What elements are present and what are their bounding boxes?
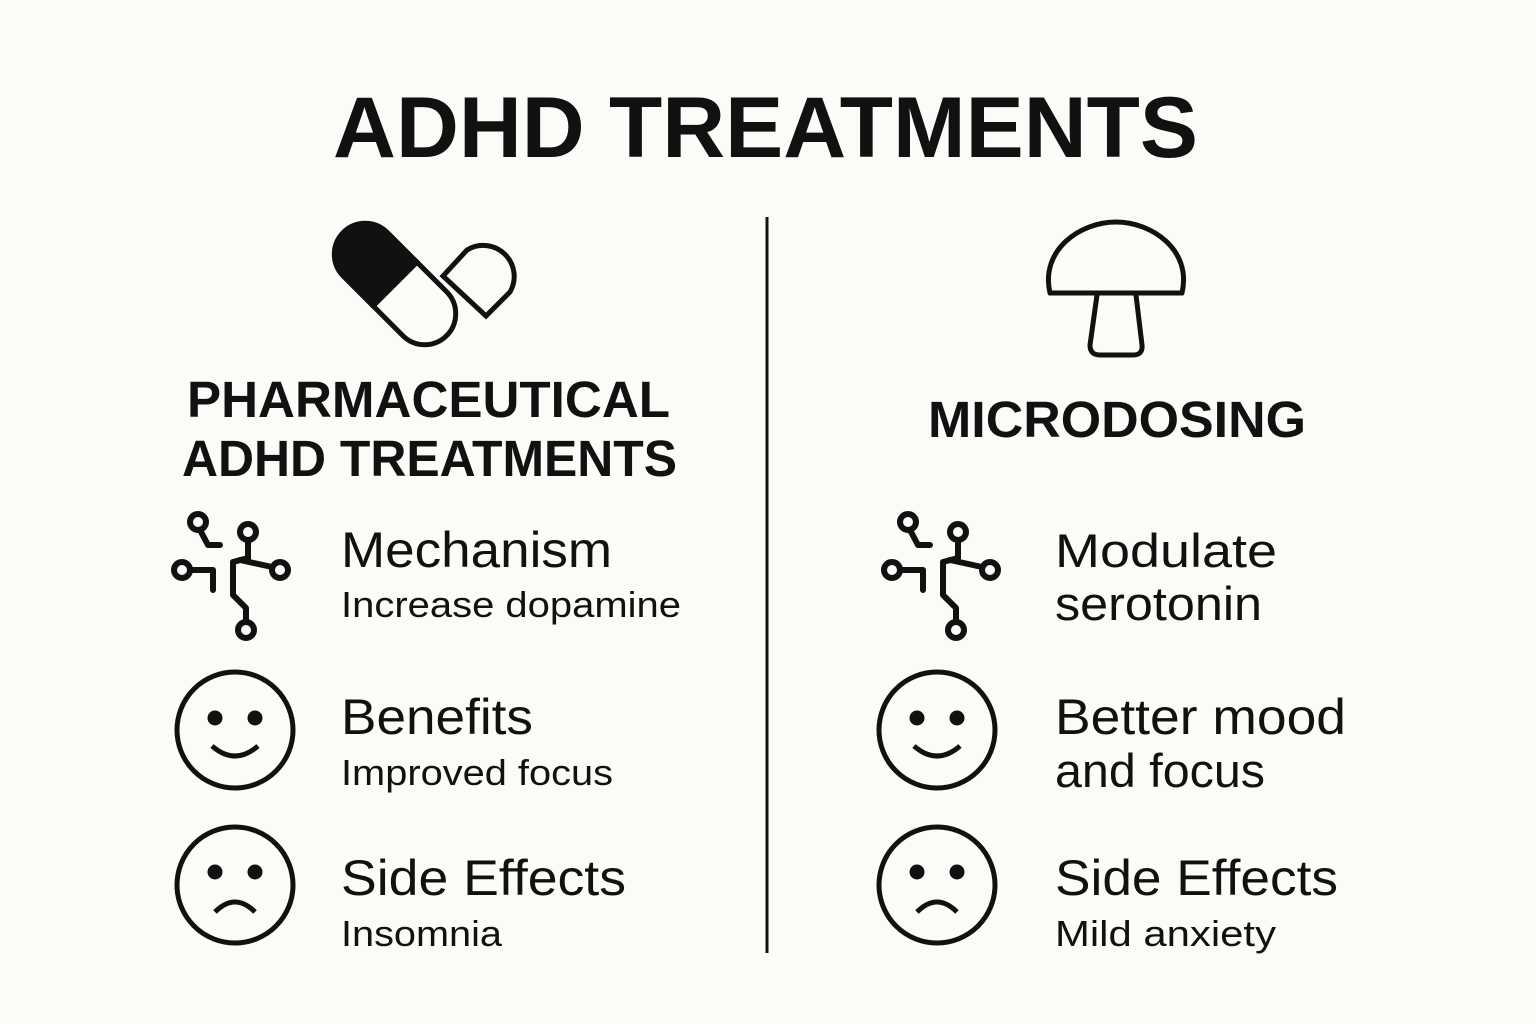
text: side effects: Mild anxiety [1055,913,1276,954]
icon: network [174,514,288,638]
text: better mood: and focus [1055,744,1265,797]
heading: microdosing: MICRODOSING [928,391,1306,448]
icon: pills [321,210,514,358]
text: side effects: Side Effects [341,850,626,906]
icon: sad face [177,827,293,943]
heading: pharmaceutical: PHARMACEUTICAL [187,371,670,428]
text: mechanism: Mechanism [341,522,612,578]
panel: microdosing [879,222,1346,954]
text: side effects [1055,850,1338,954]
text: modulate serotonin: serotonin [1055,577,1262,630]
text: benefits: Improved focus [341,752,613,793]
text: better mood: Better mood [1055,689,1346,745]
text: modulate serotonin: Modulate [1055,524,1277,577]
text: side effects: Insomnia [341,913,503,954]
icon: mushroom [1048,222,1184,355]
heading: pharmaceutical: ADHD TREATMENTS [182,430,677,487]
title: ADHD TREATMENTS [333,80,1198,176]
text: modulate serotonin [1055,524,1277,630]
text: mechanism [341,522,681,625]
icon: smiley [879,672,995,788]
text: better mood [1055,689,1346,797]
icon: sad face [879,827,995,943]
heading: pharmaceutical [182,371,677,487]
icon: network [884,514,998,638]
text: benefits: Benefits [341,689,533,745]
text: mechanism: Increase dopamine [341,584,681,625]
icon: smiley [177,672,293,788]
panel: pharmaceutical [174,210,681,954]
text: side effects: Side Effects [1055,850,1338,906]
text: side effects [341,850,626,954]
text: benefits [341,689,613,793]
